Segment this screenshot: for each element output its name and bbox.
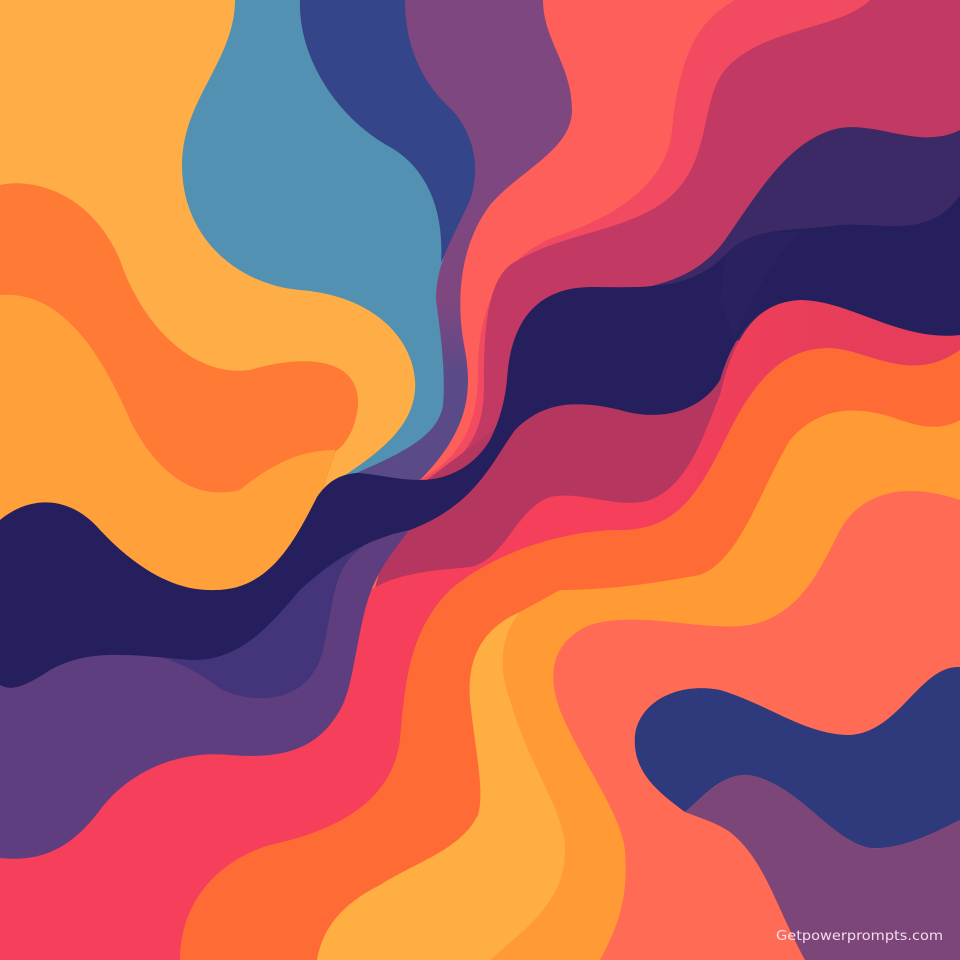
wave: slate purple strip xyxy=(345,300,480,482)
wave: navy blue top xyxy=(300,0,480,262)
wave: yellow strip xyxy=(317,612,565,960)
wave: coral lower right xyxy=(553,491,960,960)
wave: crimson under navy xyxy=(360,340,740,640)
wave: orange left xyxy=(0,183,358,560)
wave: teal blue xyxy=(182,0,470,480)
wave: dark navy band xyxy=(0,195,960,688)
watermark text: Getpowerprompts.com xyxy=(776,929,943,944)
wave: red band xyxy=(0,300,960,960)
wave: light orange left xyxy=(0,295,335,620)
wave: dark purple xyxy=(570,127,960,420)
wave: purple top xyxy=(405,0,700,480)
wave: navy shading wedge xyxy=(720,232,800,340)
wave: orange-red band xyxy=(180,348,960,960)
wave: indigo xyxy=(120,528,400,698)
wave: orange band xyxy=(440,410,960,960)
blob: purple lower right xyxy=(685,775,960,960)
wave: coral top xyxy=(420,0,760,480)
wave: crimson top right xyxy=(430,0,960,480)
wave: red strip top xyxy=(420,0,900,480)
wave: yellow top left xyxy=(0,0,560,520)
wave: purple left xyxy=(0,525,413,859)
blob: navy blue xyxy=(635,667,960,848)
